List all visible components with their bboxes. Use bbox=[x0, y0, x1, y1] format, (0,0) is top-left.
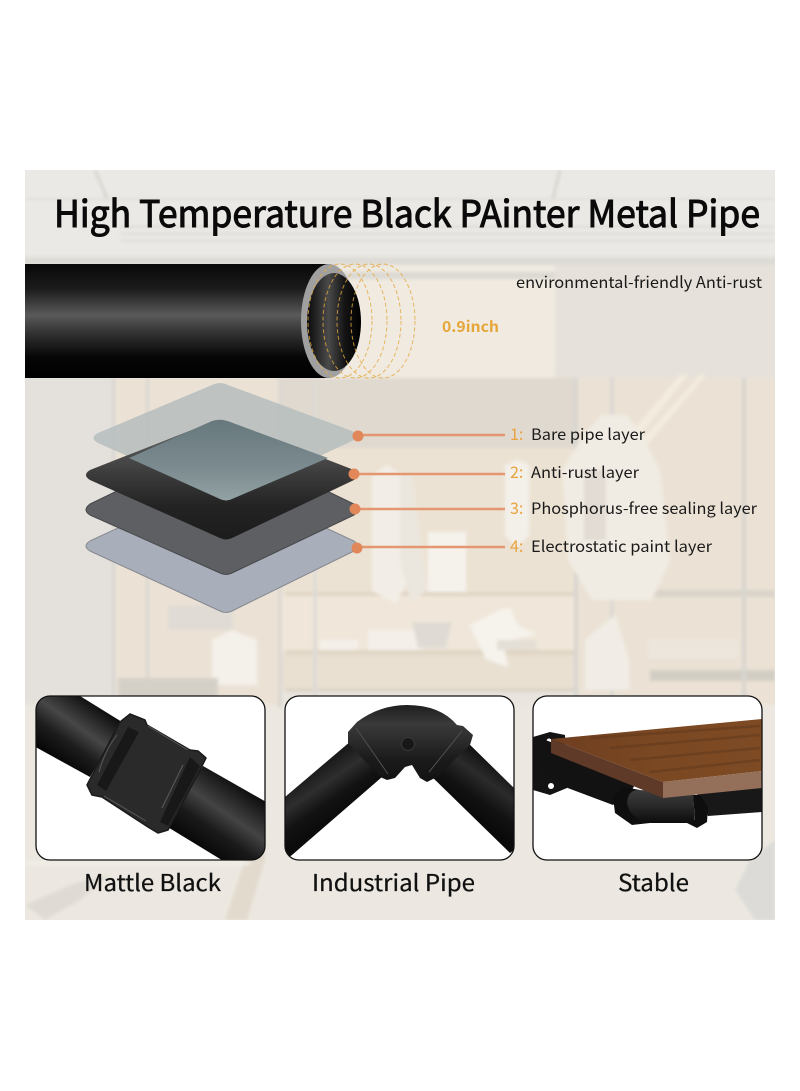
elbow bbox=[348, 705, 473, 782]
upper-left pipe segment bbox=[30, 696, 122, 777]
caption: stable: Stable bbox=[618, 864, 689, 898]
right pipe bbox=[434, 744, 514, 853]
label: bare pipe layer: 1: bbox=[510, 421, 523, 445]
background: faded wardrobe room photo bbox=[20, 165, 780, 925]
support pipe left bbox=[546, 740, 634, 805]
dashed diameter rings bbox=[308, 264, 415, 378]
elbow support bbox=[627, 790, 695, 823]
support pipe right bbox=[697, 788, 762, 816]
pipe illustration bbox=[25, 264, 415, 378]
layer stack diagram bbox=[86, 383, 358, 612]
label: phosphorus-free sealing layer: 3: bbox=[510, 495, 523, 519]
label: anti-rust layer: 2: bbox=[510, 459, 523, 483]
wood shelf edge left bbox=[551, 739, 663, 798]
label: electrostatic paint layer: Electrostatic paint layer bbox=[531, 535, 713, 557]
glass overlap bbox=[129, 420, 328, 500]
subtitle: environmental-friendly: environmental-friendly Anti-rust bbox=[516, 269, 762, 293]
pipe wall ring bbox=[301, 264, 357, 378]
left pipe bbox=[286, 743, 382, 856]
label: phosphorus-free sealing layer: Phosphorus-free sealing layer bbox=[531, 497, 758, 519]
caption: mattle black: Mattle Black bbox=[84, 864, 221, 898]
lower-right pipe segment bbox=[170, 766, 264, 860]
pipe body bbox=[25, 264, 330, 378]
wood shelf edge right bbox=[663, 771, 762, 798]
wood grain streaks bbox=[590, 726, 760, 772]
infographic canvas bbox=[25, 170, 775, 920]
left collar bbox=[613, 787, 650, 825]
right collar bbox=[687, 795, 708, 828]
layer 2: anti-rust bbox=[86, 420, 358, 540]
layer 4: electrostatic paint bbox=[86, 482, 358, 612]
elbow centre boss bbox=[402, 738, 414, 750]
dimension label: 0.9inch bbox=[442, 316, 499, 337]
caption: industrial pipe: Industrial Pipe bbox=[312, 864, 475, 898]
elbow collar highlights bbox=[356, 728, 462, 774]
coupling collars bbox=[97, 727, 200, 826]
panel: stable bbox=[533, 696, 762, 860]
wall flange bbox=[533, 732, 567, 795]
layer 3: sealing bbox=[86, 443, 358, 574]
title: High Temperature Black PAinter Metal Pipe bbox=[54, 184, 760, 238]
label: bare pipe layer: Bare pipe layer bbox=[531, 423, 646, 445]
callout lines bbox=[348, 430, 505, 554]
coupling bbox=[87, 714, 206, 833]
layer 1: bare pipe bbox=[94, 383, 356, 498]
label: electrostatic paint layer: 4: bbox=[510, 533, 523, 557]
panel: industrial pipe bbox=[285, 696, 514, 860]
pipe inner opening bbox=[307, 273, 361, 371]
wood shelf top bbox=[551, 719, 762, 782]
panel: mattle black bbox=[30, 696, 268, 865]
label: anti-rust layer: Anti-rust layer bbox=[531, 461, 640, 483]
